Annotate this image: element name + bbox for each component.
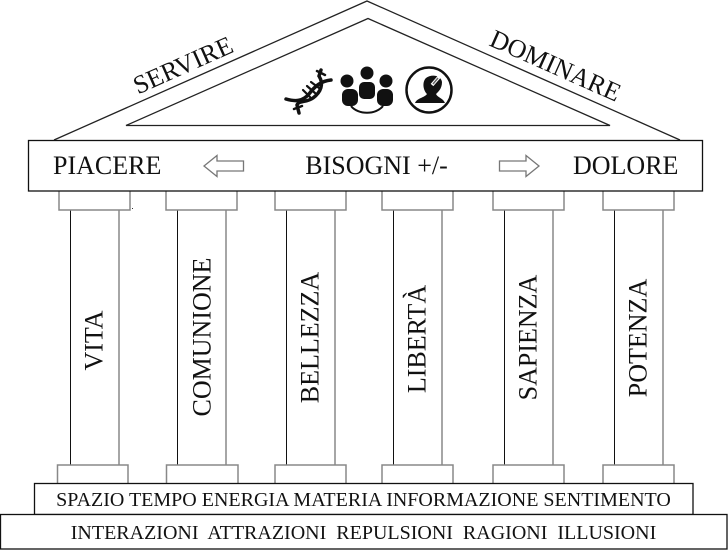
upper step: spazio tempo: SPAZIO TEMPO ENERGIA MATERIA INFORMAZIONE SENTIMENTO bbox=[56, 489, 671, 511]
roof: inner pediment bbox=[126, 18, 610, 126]
entablature panel bbox=[28, 140, 702, 191]
column: bellezza: BELLEZZA bbox=[296, 272, 324, 403]
roof: outer pediment bbox=[54, 1, 680, 140]
column: potenza bbox=[603, 191, 674, 483]
column: sapienza: SAPIENZA bbox=[514, 274, 542, 400]
stray dot beside first capital bbox=[132, 208, 133, 209]
icon: head with pencil in circle bbox=[406, 68, 452, 112]
lower step: interazioni: INTERAZIONI ATTRAZIONI REPULSIONI RAGIONI ILLUSIONI bbox=[71, 522, 656, 544]
label: bisogni: BISOGNI +/- bbox=[305, 151, 448, 180]
column: bellezza bbox=[275, 191, 346, 483]
icon: dna helix bbox=[286, 70, 331, 113]
arrow: left bbox=[204, 156, 244, 176]
column: liberta bbox=[382, 191, 453, 483]
label: servire: SERVIRE bbox=[129, 30, 237, 100]
label: dominare: DOMINARE bbox=[486, 24, 625, 107]
label: piacere: PIACERE bbox=[53, 151, 161, 180]
column: sapienza bbox=[493, 191, 564, 483]
column: comunione bbox=[166, 191, 238, 483]
column: comunione: COMUNIONE bbox=[188, 258, 216, 416]
label: dolore: DOLORE bbox=[573, 151, 678, 180]
arrow: right bbox=[500, 156, 539, 176]
column: liberta: LIBERTÀ bbox=[402, 285, 432, 393]
column: vita bbox=[58, 191, 130, 483]
column: potenza: POTENZA bbox=[624, 279, 652, 397]
lower step: interazioni bbox=[0, 514, 727, 549]
icon: group of people bbox=[340, 66, 393, 113]
column: vita: VITA bbox=[80, 310, 108, 371]
upper step: spazio tempo bbox=[34, 484, 693, 514]
